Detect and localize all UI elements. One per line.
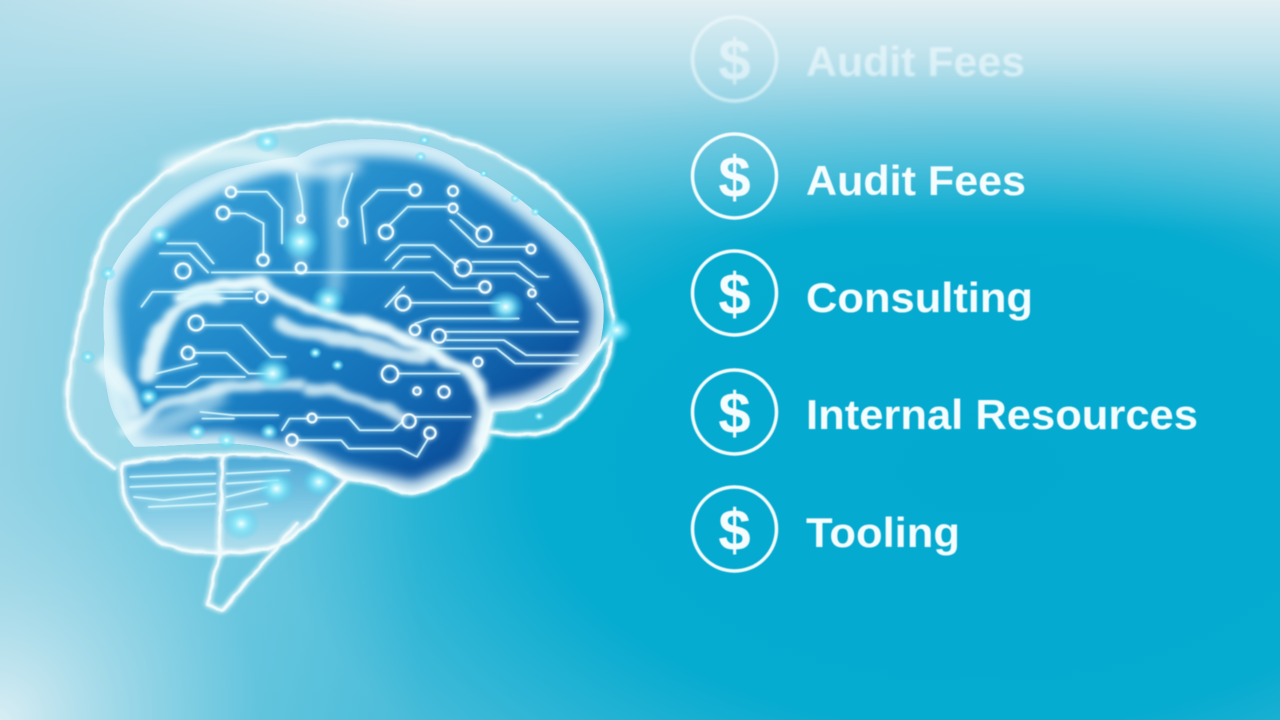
row: Audit Fees: Audit Fees bbox=[806, 157, 1026, 204]
outer outline bbox=[67, 122, 613, 610]
faded row: Audit Fees: $ bbox=[718, 28, 751, 93]
row: Internal Resources: Internal Resources bbox=[806, 391, 1198, 438]
row: Consulting: $ bbox=[718, 262, 751, 327]
cerebellum bbox=[122, 455, 345, 553]
faded row: Audit Fees bbox=[692, 17, 1025, 101]
illustration: glowing circuit brain bbox=[60, 110, 652, 610]
row: Consulting: Consulting bbox=[806, 274, 1033, 321]
cost list bbox=[692, 17, 1198, 571]
row: Internal Resources bbox=[692, 370, 1198, 454]
row: Audit Fees: $ bbox=[718, 145, 751, 210]
top fold glow bbox=[171, 153, 352, 171]
circuit nodes bbox=[176, 184, 536, 446]
row: Audit Fees bbox=[692, 134, 1026, 218]
row: Consulting bbox=[692, 251, 1033, 335]
lobe fold highlights bbox=[104, 283, 486, 444]
row: Tooling bbox=[692, 487, 960, 571]
light sparks bbox=[80, 130, 632, 540]
row: Tooling: $ bbox=[718, 498, 751, 563]
circuit traces bbox=[130, 173, 578, 510]
row: Tooling: Tooling bbox=[806, 509, 960, 556]
row: Internal Resources: $ bbox=[718, 381, 751, 446]
faded row: Audit Fees: Audit Fees bbox=[806, 38, 1025, 85]
brain shell haze bbox=[67, 122, 613, 494]
cerebrum lobe bbox=[104, 139, 604, 493]
